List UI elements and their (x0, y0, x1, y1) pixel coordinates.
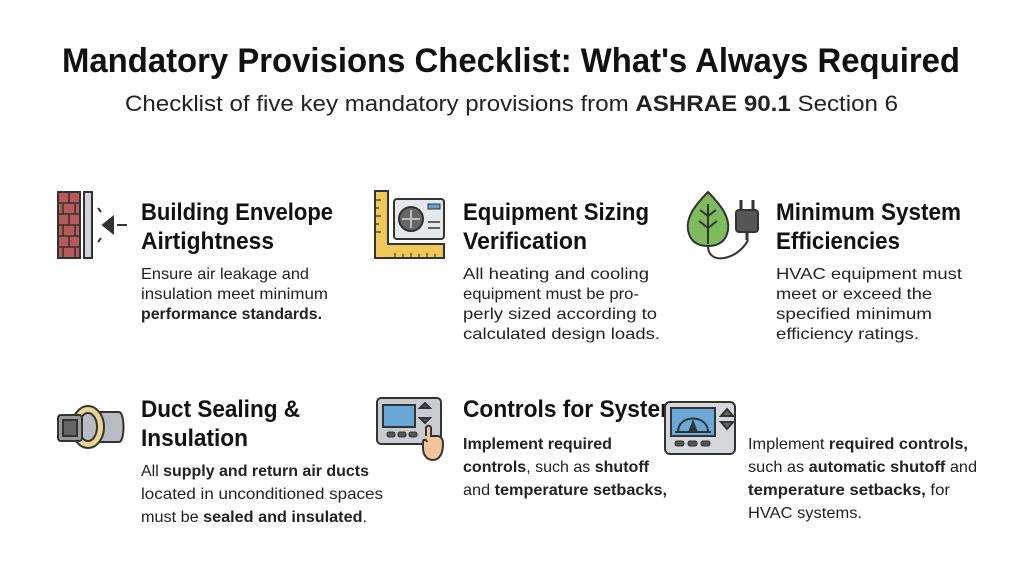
icon: brick wall (58, 192, 127, 258)
text block (748, 436, 977, 522)
text block: Ensure air leakage and (141, 266, 309, 283)
text block: Implement required controls, (748, 436, 968, 453)
text block: All heating and cooling (463, 266, 649, 283)
panel: building envelope (58, 192, 333, 323)
heading: Controls for Systems (463, 396, 693, 423)
text block (141, 266, 328, 323)
text block (463, 436, 667, 499)
panel: equipment sizing (375, 191, 660, 343)
text block: All supply and return air ducts (141, 463, 369, 480)
panel: controls duplicate (665, 402, 977, 522)
text block: specified minimum (776, 306, 932, 323)
text block: meet or exceed the (776, 286, 932, 303)
panel: duct sealing: Insulation (141, 425, 248, 452)
text block: controls, such as shutoff (463, 459, 650, 476)
text block (776, 266, 963, 343)
text block: insulation meet minimum (141, 286, 328, 303)
text block: and temperature setbacks, (463, 482, 667, 499)
heading: Duct Sealing & (141, 396, 300, 423)
text block: HVAC systems. (748, 505, 862, 522)
text block (141, 463, 383, 526)
panel: minimum efficiencies (688, 192, 963, 343)
heading: Building Envelope (141, 199, 333, 226)
text block: perly sized according to (463, 306, 657, 323)
panel: minimum efficiencies: Efficiencies (776, 228, 900, 255)
text block: such as automatic shutoff and (748, 459, 977, 476)
text block: must be sealed and insulated. (141, 509, 367, 526)
title: Mandatory Provisions Checklist: What's Always Required (62, 42, 960, 80)
heading: Equipment Sizing (463, 199, 649, 226)
icon: thermostat gauge (665, 402, 735, 454)
panel: duct sealing (58, 396, 383, 526)
text block: efficiency ratings. (776, 326, 919, 343)
text block: temperature setbacks, for (748, 482, 951, 499)
subtitle: Checklist of five key mandatory provisions from ASHRAE 90.1 Section 6 (125, 91, 898, 116)
icon: leaf and plug (688, 192, 758, 258)
text block: located in unconditioned spaces (141, 486, 383, 503)
icon: ruler and AC unit (375, 191, 444, 258)
icon: insulated duct (58, 406, 124, 448)
panel: building envelope: Airtightness (141, 228, 274, 255)
text block (463, 266, 660, 343)
text block: Implement required (463, 436, 612, 453)
text block: performance standards. (141, 306, 322, 323)
panel: controls (377, 396, 693, 499)
text block: HVAC equipment must (776, 266, 963, 283)
text block: equipment must be pro- (463, 286, 639, 303)
text block: calculated design loads. (463, 326, 660, 343)
icon: thermostat with hand (377, 398, 443, 460)
panel: equipment sizing: Verification (463, 228, 587, 255)
heading: Minimum System (776, 199, 961, 226)
